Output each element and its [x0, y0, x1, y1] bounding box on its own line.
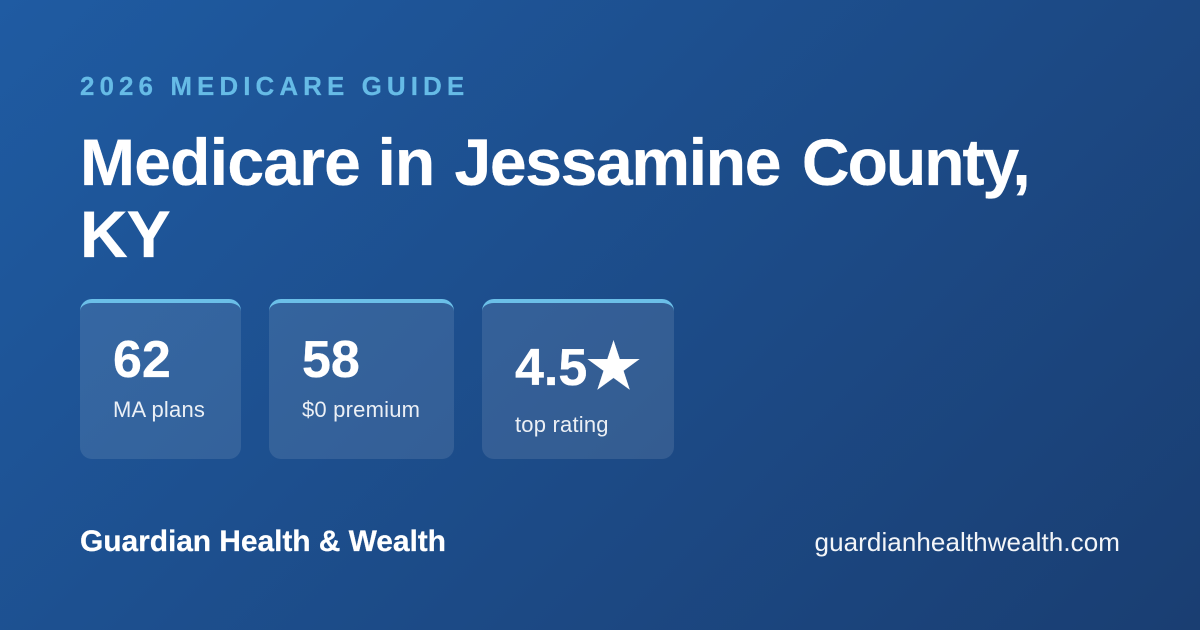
- brand name: Guardian Health & Wealth: [80, 525, 446, 558]
- title: Medicare in Jessamine County,: [80, 125, 1029, 199]
- stat card: $0 premium: [269, 299, 454, 459]
- value: 58: 58: [302, 331, 360, 389]
- website url: guardianhealthwealth.com: [815, 527, 1120, 557]
- value: 4.5 star: 4.5: [515, 339, 587, 397]
- eyebrow label: 2026 MEDICARE GUIDE: [80, 71, 469, 101]
- value: 62: 62: [113, 331, 171, 389]
- label: MA plans: MA plans: [113, 397, 205, 422]
- title: [80, 125, 1029, 271]
- value: 4.5 star: [515, 327, 644, 405]
- stat card: top rating: [482, 299, 674, 459]
- title: KY: [80, 197, 170, 271]
- stat card: top rating: ★: [584, 327, 644, 405]
- label: top rating: top rating: [515, 412, 609, 437]
- stat card: MA plans: [80, 299, 241, 459]
- label: $0 premium: $0 premium: [302, 397, 420, 422]
